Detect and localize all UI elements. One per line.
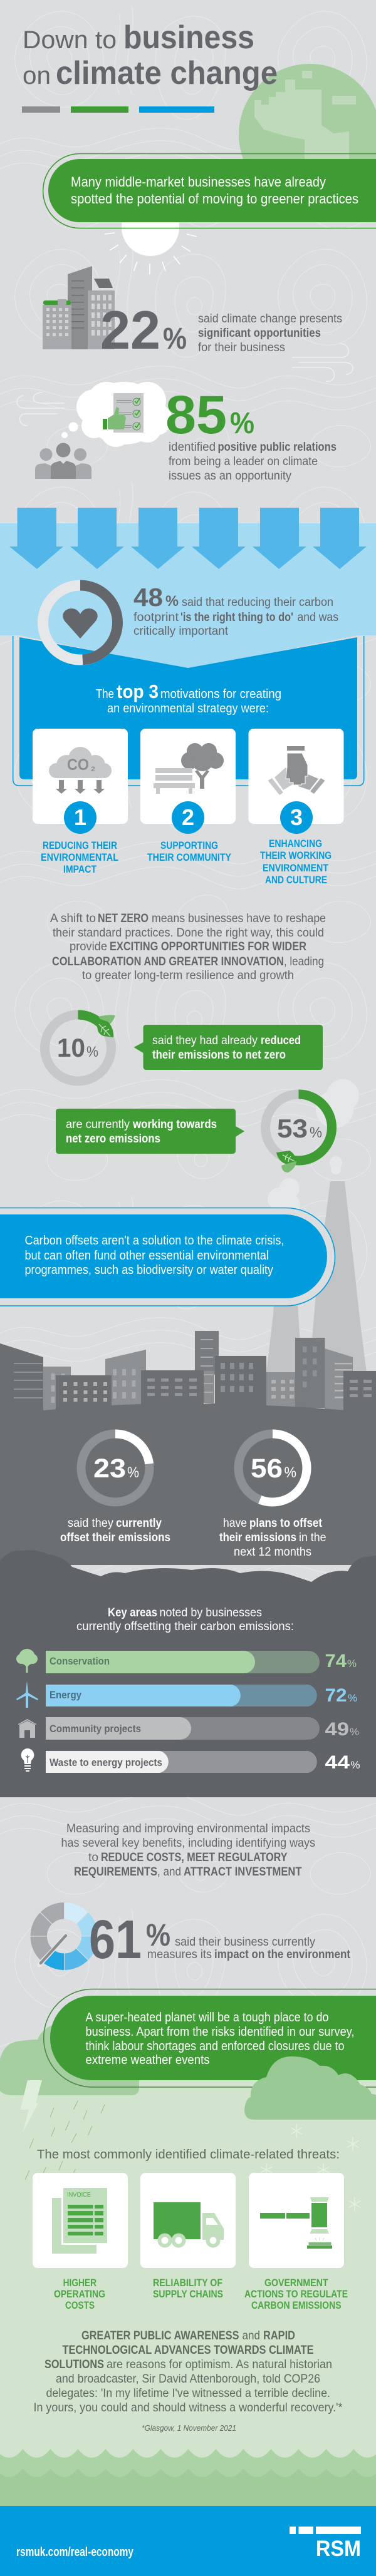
callout: reduced to net zero: said they had already: [152, 1034, 258, 1047]
icon: tree: [16, 1649, 38, 1673]
callout: super-heated planet: extreme weather events: [85, 2053, 209, 2067]
icon: light bulb: [21, 1748, 34, 1772]
stat: 22%: [100, 300, 342, 361]
stat: 85%: issues as an opportunity: [169, 470, 291, 483]
card: government actions: ACTIONS TO REGULATE: [244, 2289, 348, 2300]
chart: 23% ring: [81, 1434, 149, 1502]
card: higher operating costs: COSTS: [65, 2300, 95, 2311]
text block: net zero: means businesses have to reshape: [152, 911, 326, 925]
card: government actions: CARBON EMISSIONS: [251, 2300, 342, 2311]
icon: leaf: [97, 1015, 115, 1037]
heading: key areas: noted by businesses: [159, 1606, 262, 1619]
heading: key areas: currently offsetting their carbon emissions:: [76, 1619, 294, 1633]
text block: net zero: A shift to: [50, 911, 96, 925]
icon: lightning bolt: [20, 2080, 42, 2133]
title colour bars: [22, 106, 214, 113]
heading: key areas: Key areas: [108, 1606, 157, 1619]
stat: 61%: impact on the environment: [214, 1947, 350, 1961]
panel: city skyline and dark section: [0, 1331, 376, 1565]
chart: 23% ring: %: [127, 1464, 139, 1481]
panel: light blue band: [0, 523, 376, 670]
bar: conservation 74%: [16, 1649, 357, 1673]
icon: snowflakes: [261, 2124, 361, 2211]
bar: waste to energy 44%: 44: [325, 1752, 350, 1773]
stat: 48%: [133, 583, 338, 638]
text block: net zero: their standard practices. Done the right way, this could: [53, 926, 324, 940]
stat: 61%: measures its: [147, 1947, 212, 1961]
bar: energy 72%: Energy: [50, 1689, 81, 1701]
stat: 22%: 22: [100, 300, 160, 361]
card 1: reducing environmental impact: CO: [67, 756, 89, 774]
icon: speech cloud with checklist: [61, 382, 172, 447]
text block: net zero: COLLABORATION AND GREATER INNOVATION: [52, 955, 284, 968]
bar: community projects 49%: %: [350, 1726, 359, 1738]
stat: 85%: %: [230, 407, 254, 440]
card 2: supporting community: THEIR COMMUNITY: [147, 852, 231, 863]
heading: top 3: motivations for creating: [160, 687, 281, 701]
heading: climate threats: The most commonly identified climate-related threats:: [37, 2148, 340, 2162]
callout: super-heated planet: business. Apart from the risks identified in our survey,: [85, 2025, 355, 2039]
callout: working towards net zero: [56, 1109, 244, 1154]
card 2: supporting community: SUPPORTING: [160, 840, 218, 851]
smoke clouds: [268, 1079, 359, 1217]
callout: reduced to net zero: their emissions to net zero: [152, 1048, 286, 1062]
stat text: 56%: have: [223, 1516, 247, 1530]
text block: reasons for optimism: [34, 2329, 343, 2414]
stat text: 56%: their emissions: [219, 1531, 296, 1544]
title: [23, 19, 278, 91]
stat: 61%: said their business currently: [175, 1935, 315, 1949]
stat: 85%: identified: [169, 441, 216, 454]
stat: 85%: positive public relations: [218, 441, 337, 454]
stat: 22%: said climate change presents: [198, 312, 342, 326]
waves: [0, 2449, 376, 2506]
chart: 48% donut with heart: [43, 585, 118, 660]
callout: middle-market businesses: Many middle-market businesses have already: [71, 174, 326, 190]
bar: conservation 74%: 74: [325, 1651, 347, 1671]
card: government actions: [244, 2173, 348, 2311]
text block: measuring benefits: , and: [157, 1865, 181, 1879]
chart: 53% ring: %: [310, 1124, 322, 1141]
card 1: reducing environmental impact: IMPACT: [63, 864, 97, 875]
stat: 22%: significant opportunities: [198, 327, 321, 340]
bar: waste to energy 44%: [21, 1748, 360, 1773]
arrows: six downward arrows: [9, 508, 367, 569]
text block: net zero: NET ZERO: [98, 911, 149, 925]
stat text: 56%: plans to offset: [249, 1516, 322, 1530]
text block: measuring benefits: Measuring and improving environmental impacts: [66, 1822, 310, 1835]
smokestacks: [266, 1181, 367, 1372]
stat: 85%: 85: [165, 385, 227, 445]
callout: reduced to net zero: reduced: [261, 1034, 301, 1047]
card: higher operating costs: INVOICE: [67, 2192, 91, 2199]
bar chart: key offset areas: [16, 1649, 360, 1773]
card 3: working environment: 3: [290, 804, 303, 830]
chart: 56% ring: 56: [251, 1454, 283, 1484]
stat text: 56%: [219, 1516, 326, 1559]
icon: rain: [25, 2101, 105, 2180]
stat text: 23%: said they: [68, 1516, 113, 1530]
callout: super-heated planet: A super-heated planet will be a tough place to do: [85, 2011, 328, 2024]
text block: reasons for optimism: delegates: 'In my lifetime I've witnessed a terrible decline.: [46, 2386, 330, 2400]
heading: top 3: top 3: [117, 680, 159, 702]
text block: reasons for optimism: are reasons for optimism. As natural historian: [107, 2358, 332, 2371]
heading: top 3: an environmental strategy were:: [107, 702, 269, 716]
callout: carbon offsets: [0, 1208, 335, 1306]
text block: measuring benefits: has several key benefits, including identifying ways: [61, 1836, 315, 1850]
icon: leaf: [276, 1151, 296, 1173]
card 2: supporting community: [140, 729, 236, 863]
card 2: supporting community: 2: [182, 804, 194, 830]
icon: wind right: [292, 344, 353, 381]
chart: 10% ring: %: [86, 1044, 98, 1060]
chart: gauge: [30, 1902, 98, 1971]
text block: net zero: [50, 911, 326, 982]
card 1: reducing environmental impact: 1: [74, 804, 86, 830]
stat text: 23%: offset their emissions: [60, 1531, 170, 1544]
stat: 85%: from being a leader on climate: [169, 455, 318, 468]
stat text: 56%: in the: [299, 1531, 326, 1544]
chart: 56% ring: %: [285, 1464, 296, 1481]
card: higher operating costs: HIGHER: [63, 2277, 97, 2289]
icon: sun: [105, 198, 197, 274]
callout: super-heated planet: think labour shortages and enforced closures due to: [85, 2040, 345, 2053]
bar: conservation 74%: %: [347, 1658, 357, 1670]
bar: waste to energy 44%: Waste to energy projects: [50, 1757, 162, 1768]
footer: [0, 2506, 376, 2576]
chart: 53% ring: 53: [277, 1114, 308, 1143]
heading: key areas: [76, 1606, 294, 1633]
title: climate change: [56, 55, 278, 91]
icon: house: [18, 1719, 36, 1738]
icon: buildings: [43, 266, 115, 349]
card: higher operating costs: [33, 2173, 128, 2311]
callout: middle-market businesses: spotted the potential of moving to greener practices: [71, 191, 358, 207]
text block: net zero: to greater long-term resilience and growth: [82, 968, 294, 982]
heading: top 3: [96, 680, 281, 716]
icon: storm cloud left: [0, 2024, 139, 2095]
stat: 48%: 48: [133, 583, 163, 612]
text block: measuring benefits: REDUCE COSTS, MEET REGULATORY: [101, 1850, 287, 1864]
text block: reasons for optimism: RAPID: [263, 2329, 295, 2343]
card: government actions: GOVERNMENT: [264, 2277, 328, 2289]
text block: measuring benefits: to: [88, 1850, 98, 1864]
callout: working towards net zero: are currently: [66, 1117, 130, 1131]
stat: 48%: 'is the right thing to do': [180, 610, 293, 624]
chart: 10% ring: [45, 1015, 115, 1081]
stat: 61%: 61: [89, 1909, 142, 1970]
text block: net zero: , leading: [284, 955, 324, 968]
panel: dark lower cloud band: [0, 1550, 376, 1797]
footer link: rsmuk.com/real-economy: [16, 2545, 134, 2559]
stat: 48%: footprint: [133, 610, 179, 624]
callout: carbon offsets: but can often fund other essential environmental: [25, 1249, 269, 1263]
bar: conservation 74%: Conservation: [50, 1655, 110, 1667]
text block: measuring benefits: [61, 1822, 315, 1879]
stat: 61%: %: [146, 1917, 170, 1953]
icon: people: [35, 443, 91, 479]
text block: measuring benefits: ATTRACT INVESTMENT: [184, 1865, 302, 1879]
chart: 10% ring: 10: [57, 1033, 85, 1062]
footnote: *Glasgow, 1 November 2021: [142, 2423, 236, 2433]
callout: super-heated planet: [44, 1989, 376, 2087]
card 1: reducing environmental impact: [33, 729, 128, 875]
panel: top 3 motivations: [13, 636, 364, 886]
logo: RSM: [290, 2527, 361, 2561]
card 1: reducing environmental impact: 2: [91, 766, 95, 773]
card 3: working environment: [248, 729, 343, 886]
text block: reasons for optimism: TECHNOLOGICAL ADVANCES TOWARDS CLIMATE: [63, 2343, 313, 2357]
title: on: [23, 62, 51, 90]
callout: middle-market businesses: [43, 154, 376, 228]
text block: reasons for optimism: GREATER PUBLIC AWARENESS: [81, 2329, 239, 2343]
callout: carbon offsets: programmes, such as biodiversity or water quality: [25, 1263, 273, 1277]
stat text: 23%: currently: [116, 1516, 162, 1530]
stat: 85%: [165, 385, 337, 483]
logo: RSM: RSM: [316, 2537, 361, 2561]
bar: community projects 49%: [18, 1717, 359, 1740]
icon: wind turbine: [16, 1681, 38, 1708]
icon: wind left: [17, 393, 65, 426]
icon: globe: [239, 64, 376, 159]
text block: reasons for optimism: and broadcaster, Sir David Attenborough, told COP26: [56, 2372, 320, 2386]
text block: reasons for optimism: SOLUTIONS: [44, 2358, 104, 2371]
callout: working towards net zero: working towards: [132, 1117, 217, 1131]
stat text: 56%: next 12 months: [234, 1545, 311, 1559]
bar: community projects 49%: 49: [325, 1719, 349, 1740]
chart: 56% ring: [238, 1434, 307, 1502]
callout: working towards net zero: net zero emissions: [66, 1132, 160, 1146]
card 1: reducing environmental impact: ENVIRONMENTAL: [41, 852, 118, 863]
stat: 22%: %: [163, 322, 187, 356]
bar: energy 72%: %: [348, 1692, 357, 1704]
card: reliability of supply chains: RELIABILITY OF: [153, 2277, 222, 2289]
card 3: working environment: THEIR WORKING: [260, 850, 332, 861]
chart: 23% ring: 23: [93, 1454, 126, 1484]
bar: waste to energy 44%: %: [351, 1759, 360, 1771]
icon: cloud right: [244, 2056, 376, 2120]
callout: carbon offsets: Carbon offsets aren't a solution to the climate crisis,: [25, 1234, 285, 1248]
text block: net zero: provide: [70, 940, 107, 953]
text block: reasons for optimism: and: [242, 2329, 260, 2343]
bar: energy 72%: [16, 1681, 357, 1708]
title: Down to: [23, 26, 117, 54]
bar: community projects 49%: Community projects: [50, 1723, 141, 1735]
stat text: 23%: [60, 1516, 170, 1544]
card 1: reducing environmental impact: REDUCING THEIR: [43, 840, 117, 851]
heading: top 3: The: [96, 687, 114, 701]
stat: 48%: and was: [297, 610, 338, 624]
stat: 48%: critically important: [133, 624, 229, 638]
bar: energy 72%: 72: [325, 1685, 347, 1706]
title: business: [123, 19, 254, 56]
card 3: working environment: ENHANCING: [269, 838, 322, 849]
stat: 61%: [89, 1909, 350, 1970]
card 3: working environment: ENVIRONMENT: [263, 863, 328, 874]
stat: 48%: said that reducing their carbon: [182, 595, 333, 609]
chart: 53% ring: [266, 1094, 332, 1173]
card: reliability of supply chains: SUPPLY CHAINS: [153, 2289, 223, 2300]
card: reliability of supply chains: [140, 2173, 236, 2300]
card 3: working environment: AND CULTURE: [265, 875, 327, 886]
card: higher operating costs: OPERATING: [54, 2289, 105, 2300]
text block: measuring benefits: REQUIREMENTS: [74, 1865, 157, 1879]
stat: 22%: for their business: [198, 341, 285, 354]
text block: net zero: EXCITING OPPORTUNITIES FOR WIDER: [110, 940, 306, 953]
callout: reduced to net zero: [134, 1025, 323, 1070]
stat: 48%: %: [165, 593, 179, 610]
text block: reasons for optimism: In yours, you could and should witness a wonderful recovery.'*: [34, 2401, 343, 2414]
